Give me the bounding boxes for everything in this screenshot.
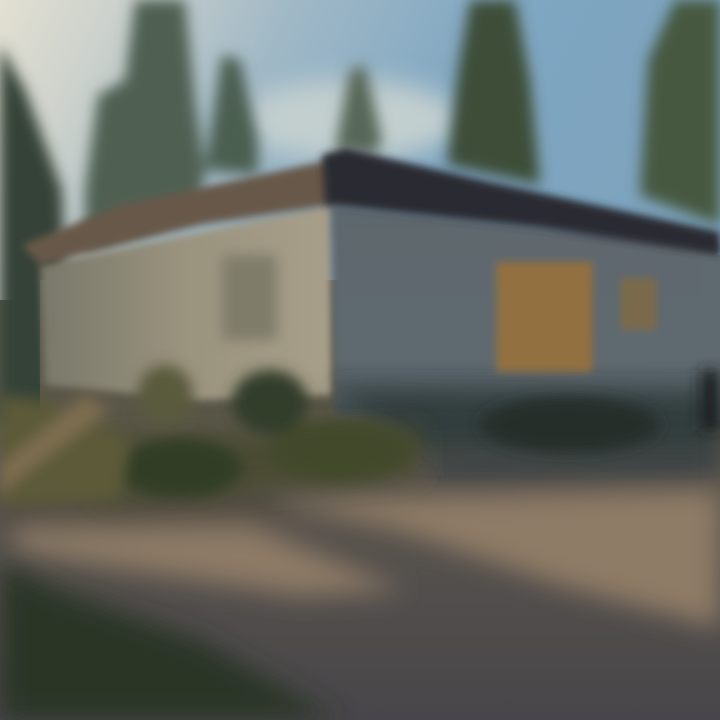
- backing behind house base: [40, 280, 720, 450]
- right roof: [322, 148, 720, 255]
- left wall window: [222, 255, 277, 340]
- small window: [620, 278, 656, 330]
- house right wall: [330, 205, 720, 425]
- left roof eave: [22, 160, 332, 265]
- lawn and path on the left: [0, 395, 130, 505]
- sky: [0, 0, 720, 300]
- house left wall: [40, 205, 332, 400]
- main orange window: [496, 262, 592, 372]
- pine trees: [0, 0, 720, 420]
- grass under house: [100, 430, 420, 500]
- wall right edge fill: [700, 255, 720, 420]
- shrubs: [118, 365, 720, 498]
- wall lower shadow: [330, 390, 720, 455]
- foreground grass bottom left: [0, 560, 340, 720]
- ground: [0, 440, 720, 720]
- horizon glow: [240, 80, 460, 160]
- sunlit patches on driveway: [0, 445, 720, 628]
